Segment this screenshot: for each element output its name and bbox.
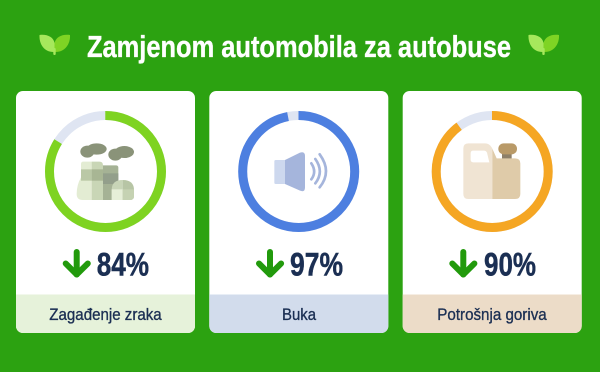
panel: noise bbox=[209, 91, 388, 333]
label: noise: Buka bbox=[282, 305, 316, 324]
icon: right leaves bbox=[528, 35, 559, 55]
icon: down arrow bbox=[259, 252, 281, 274]
title: Zamjenom automobila za autobuse bbox=[87, 29, 511, 64]
icon: left leaves bbox=[39, 35, 70, 55]
value: 97%: 97% bbox=[290, 246, 343, 282]
panel: air pollution bbox=[16, 91, 195, 333]
icon: fuel canister bbox=[463, 143, 520, 199]
icon: down arrow bbox=[66, 252, 88, 274]
icon: down arrow bbox=[452, 252, 474, 274]
value: 90%: 90% bbox=[484, 246, 536, 282]
icon: speaker bbox=[274, 152, 326, 191]
label: fuel consumption: Potrošnja goriva bbox=[437, 305, 547, 324]
icon: factory bbox=[77, 143, 134, 200]
ring chart 97% bbox=[243, 116, 355, 228]
value: 84%: 84% bbox=[97, 246, 149, 282]
label: air pollution: Zagađenje zraka bbox=[49, 305, 162, 324]
panel: fuel consumption bbox=[403, 91, 582, 333]
ring chart 84% bbox=[50, 116, 162, 228]
ring chart 90% bbox=[436, 116, 548, 228]
